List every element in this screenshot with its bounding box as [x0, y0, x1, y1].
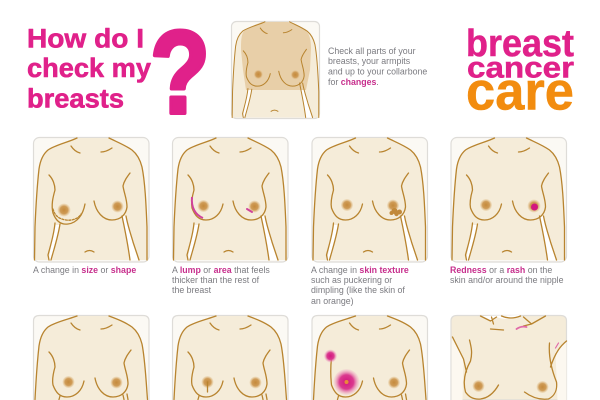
caption: redness or rash: Redness or a rash on the: [450, 265, 552, 275]
title: check my: [27, 53, 151, 83]
title: [27, 24, 151, 114]
lump marks: [192, 197, 252, 218]
caption: size or shape: A change in size or shape: [33, 265, 136, 275]
text block: check instructions: for changes.: [328, 77, 379, 87]
red nipple: [528, 200, 540, 212]
shaded check area: [241, 22, 311, 90]
logo: breast: [466, 23, 574, 65]
panel: size or shape: [34, 138, 149, 262]
red swelling armpit: [324, 350, 337, 362]
panel: row two fourth: [451, 315, 566, 400]
caption: skin texture: dimpling (like the skin of: [311, 285, 405, 295]
panel: check area illustration: [232, 22, 320, 118]
title: How do I: [27, 24, 144, 54]
text block: check instructions: and up to your collarbone: [328, 66, 427, 76]
logo: [466, 23, 574, 122]
mark armpit: [556, 343, 558, 348]
panel: row two second: [172, 316, 288, 400]
caption: redness or rash: skin and/or around the nipple: [450, 275, 564, 285]
caption: skin texture: such as puckering or: [311, 275, 392, 285]
puckered skin: [390, 208, 402, 216]
logo: care: [466, 62, 574, 122]
logo: cancer: [467, 52, 574, 84]
panel: row two first: [34, 316, 149, 400]
mark collarbone: [516, 327, 526, 329]
caption: skin texture: an orange): [311, 296, 354, 306]
red swelling breast: [334, 369, 360, 395]
caption: lump or area: thicker than the rest of: [172, 275, 260, 285]
question mark: ?: [150, 7, 210, 139]
text block: check instructions: breasts, your armpits: [328, 56, 411, 66]
title: breasts: [27, 84, 124, 114]
panel: skin texture: [312, 138, 428, 262]
caption: skin texture: A change in skin texture: [311, 265, 409, 275]
panel: lump or area: [172, 138, 288, 262]
panel: redness or rash: [451, 138, 566, 262]
panel: row two third: [312, 316, 428, 400]
caption: lump or area: the breast: [172, 285, 212, 295]
caption: lump or area: A lump or area that feels: [172, 265, 270, 275]
text block: check instructions: Check all parts of your: [328, 46, 416, 56]
